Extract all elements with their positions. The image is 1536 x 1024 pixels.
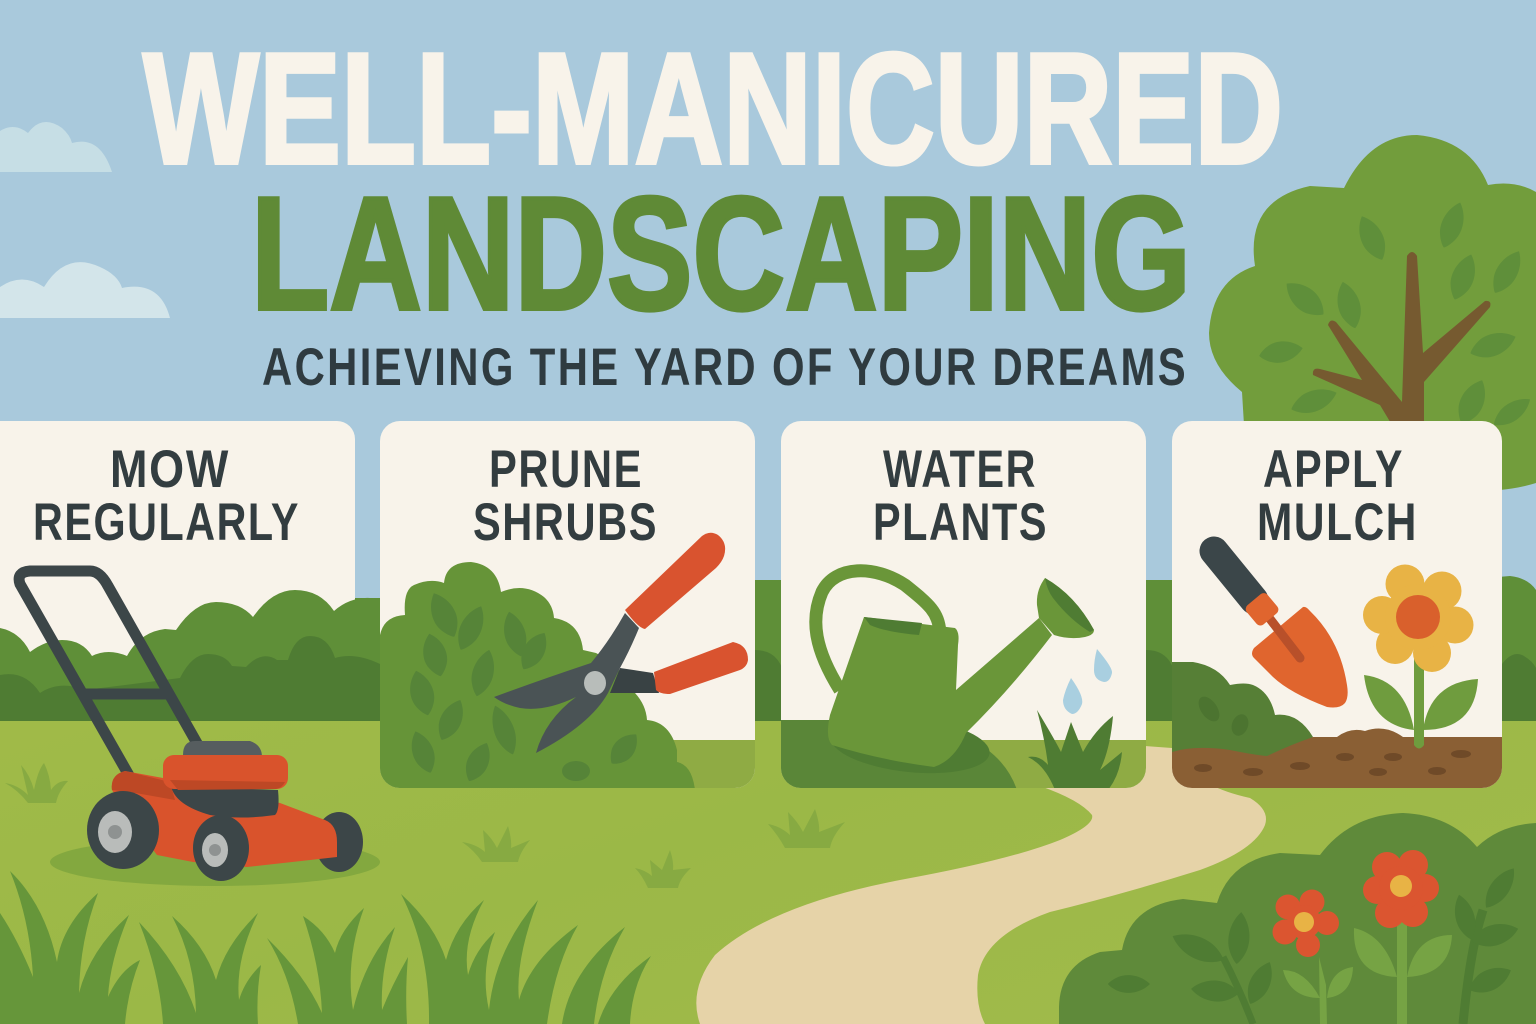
tree leaves (1258, 199, 1535, 432)
heading: prune shrubs: SHRUBS (473, 493, 658, 552)
heading: mow regularly: MOW (110, 440, 230, 499)
tree (1209, 135, 1536, 490)
cloud upper left (0, 122, 112, 172)
tree trunk (1313, 252, 1490, 425)
bushes with flowers bottom right (1059, 813, 1536, 1024)
heading: prune shrubs (473, 440, 658, 552)
pruning shears (494, 533, 748, 753)
middle wheel (193, 815, 249, 881)
engine (171, 786, 279, 818)
front wheel (87, 791, 159, 869)
heading: water plants: PLANTS (873, 493, 1048, 552)
flower (1363, 564, 1478, 748)
subtitle: ACHIEVING THE YARD OF YOUR DREAMS (262, 338, 1188, 397)
heading: mow regularly: REGULARLY (33, 493, 300, 552)
panel: mow card background (0, 421, 355, 741)
large flower (1354, 850, 1452, 1024)
soil (1172, 729, 1502, 790)
trowel (1214, 551, 1348, 708)
panel: apply mulch (1172, 421, 1502, 790)
heading: apply mulch: MULCH (1257, 493, 1418, 552)
heading: mow regularly (33, 440, 300, 552)
rear wheel far (315, 812, 363, 872)
mower handle (19, 571, 198, 800)
distant hedge band (355, 576, 1536, 723)
mower deck (112, 771, 337, 867)
small flower (1272, 890, 1353, 1024)
small shrub (1172, 662, 1313, 760)
grass tuft (1028, 710, 1122, 790)
panel: water plants (781, 421, 1146, 790)
grass tufts on lawn (5, 763, 845, 888)
hedge behind mower (0, 590, 380, 722)
heading: water plants (873, 440, 1048, 552)
water drops (1063, 649, 1112, 714)
mower shadow (50, 838, 380, 886)
heading: apply mulch: APPLY (1263, 440, 1404, 499)
heading: prune shrubs: PRUNE (489, 440, 643, 499)
panel: prune shrubs (380, 421, 755, 790)
heading: apply mulch (1257, 440, 1418, 552)
sky background (0, 0, 1536, 740)
title: landscaping: LANDSCAPING (251, 164, 1191, 344)
shrub (380, 562, 695, 790)
heading: water plants: WATER (883, 440, 1037, 499)
watering can (816, 571, 1094, 767)
cloud lower left (0, 262, 170, 318)
lawn (0, 721, 1536, 1024)
foreground tall grass (0, 871, 651, 1024)
garden path (696, 745, 1266, 1024)
dark plants (1108, 863, 1521, 1024)
lawn mower (19, 571, 380, 886)
